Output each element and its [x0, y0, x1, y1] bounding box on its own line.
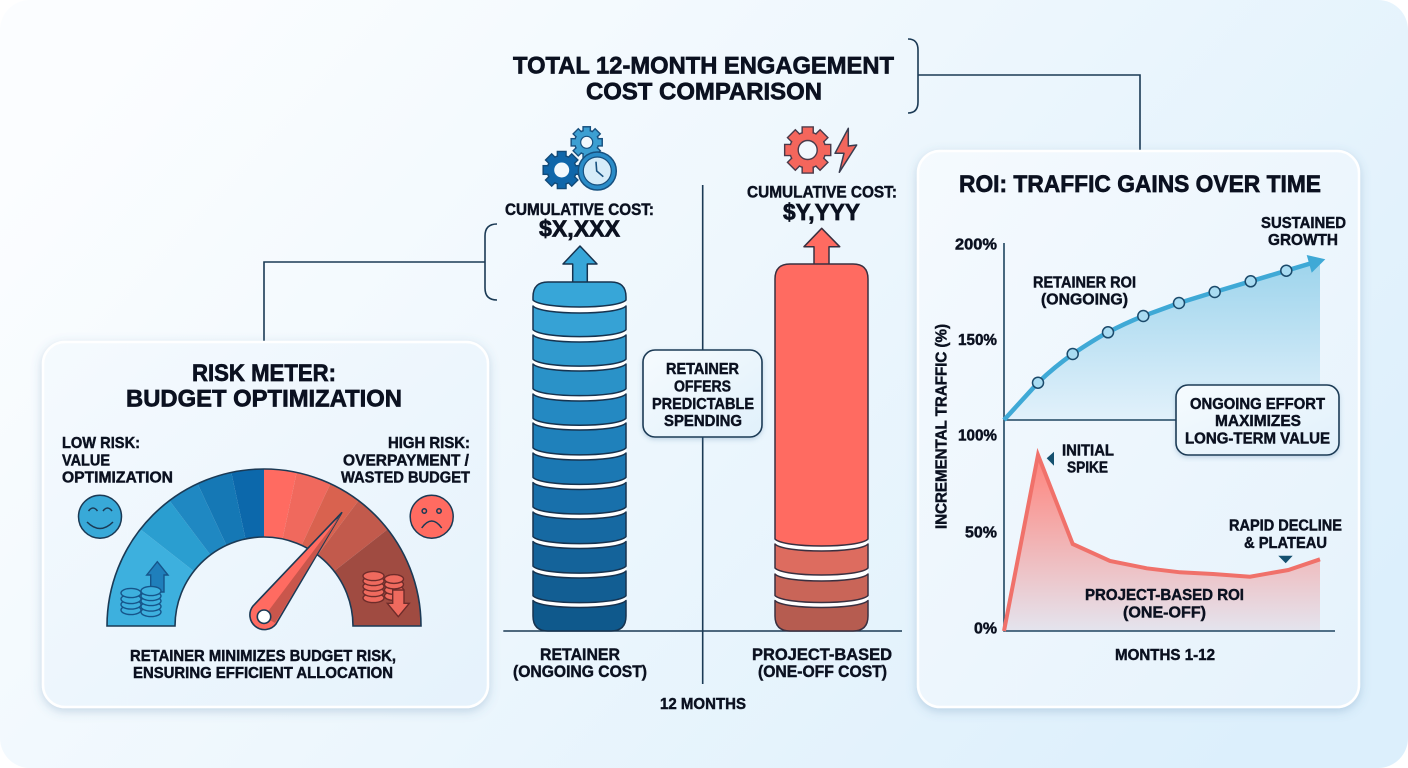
callout: long-term value: ONGOING EFFORT: [1190, 396, 1326, 413]
marker: spike: [1047, 452, 1054, 466]
label: high risk: OVERPAYMENT /: [343, 452, 470, 470]
callout: predictable spending: SPENDING: [664, 413, 742, 430]
connector: title bracket to ROI panel: [908, 39, 1140, 151]
axes: [1004, 243, 1335, 631]
title: COST COMPARISON: [586, 78, 822, 106]
arrow: retainer cost up: [563, 246, 597, 285]
title: TOTAL 12-MONTH ENGAGEMENT: [513, 52, 894, 80]
y-axis labels: 150%: [958, 332, 997, 349]
label: initial spike: [1062, 443, 1114, 477]
gauge: [107, 469, 421, 630]
divider: center line: [503, 185, 902, 684]
label: project-based bar: (ONE-OFF COST): [758, 663, 887, 681]
title: [513, 52, 894, 106]
callout: predictable spending: [643, 350, 762, 437]
label: initial spike: SPIKE: [1067, 460, 1108, 477]
icon: coins with down arrow: [363, 571, 409, 617]
callout: long-term value: [1176, 385, 1339, 455]
label: retainer cumulative cost: [505, 201, 654, 242]
x-axis title: MONTHS 1-12: [1115, 647, 1215, 664]
label: 12 months: 12 MONTHS: [660, 696, 746, 713]
label: high risk: WASTED BUDGET: [341, 470, 470, 486]
text: risk takeaway: [130, 648, 396, 682]
y-axis labels: 200%: [955, 236, 997, 253]
label: project-based bar: [752, 646, 892, 681]
callout: predictable spending: RETAINER: [666, 361, 739, 378]
callout: predictable spending: OFFERS: [674, 378, 731, 396]
label: project cumulative cost: CUMULATIVE COST:: [747, 184, 897, 202]
label: rapid decline: [1229, 518, 1342, 552]
label: project-based ROI: [1085, 587, 1244, 621]
label: retainer bar: [513, 646, 647, 681]
callout: predictable spending: PREDICTABLE: [652, 396, 754, 413]
label: low risk: LOW RISK:: [62, 435, 140, 452]
y-axis title: INCREMENTAL TRAFFIC (%): [934, 324, 950, 529]
icon: gear and lightning: [785, 127, 857, 173]
label: retainer bar: RETAINER: [540, 646, 620, 664]
icon: frowning face: [410, 495, 453, 538]
label: sustained growth: GROWTH: [1268, 232, 1338, 249]
label: project-based ROI: (ONE-OFF): [1123, 604, 1206, 621]
line: project-based ROI: [1004, 455, 1320, 631]
label: project-based ROI: PROJECT-BASED ROI: [1085, 587, 1244, 604]
label: retainer cumulative cost: $X,XXX: [539, 216, 621, 242]
icon: gears and clock: [543, 127, 616, 190]
label: high risk: HIGH RISK:: [388, 435, 470, 452]
label: rapid decline: RAPID DECLINE: [1229, 518, 1342, 535]
label: high risk: [341, 435, 470, 486]
line: retainer ROI: [1004, 255, 1325, 420]
arrow: project cost up: [804, 228, 840, 267]
label: low risk: VALUE: [62, 452, 110, 470]
icon: smiling face: [78, 495, 122, 538]
bar: retainer ongoing cost: [533, 246, 626, 631]
callout: long-term value: LONG-TERM VALUE: [1185, 430, 1330, 447]
heading: risk meter: [126, 360, 402, 412]
needle: [250, 513, 342, 630]
text: risk takeaway: ENSURING EFFICIENT ALLOCATION: [133, 665, 393, 682]
label: sustained growth: SUSTAINED: [1261, 215, 1346, 232]
y-axis labels: 100%: [958, 428, 997, 445]
label: project-based bar: PROJECT-BASED: [752, 646, 892, 664]
area: project-based: [1004, 455, 1320, 631]
chart: incremental traffic: [934, 215, 1346, 664]
text: risk takeaway: RETAINER MINIMIZES BUDGET RISK,: [130, 648, 396, 665]
heading: risk meter: BUDGET OPTIMIZATION: [126, 386, 402, 412]
icon: coins with up arrow: [121, 562, 168, 617]
heading: ROI: ROI: TRAFFIC GAINS OVER TIME: [959, 171, 1321, 198]
label: low risk: [62, 435, 173, 486]
label: rapid decline: & PLATEAU: [1244, 535, 1327, 552]
label: retainer cumulative cost: CUMULATIVE COST:: [505, 201, 654, 219]
y-axis labels: [955, 236, 997, 637]
bar: project-based one-off cost: [775, 228, 868, 631]
label: initial spike: INITIAL: [1062, 443, 1114, 460]
panel: ROI traffic gains: [918, 151, 1359, 707]
label: retainer ROI: RETAINER ROI: [1033, 274, 1136, 291]
heading: risk meter: RISK METER:: [192, 360, 336, 387]
marker: plateau: [1278, 556, 1293, 563]
label: retainer ROI: [1033, 274, 1136, 309]
label: project cumulative cost: $Y,YYY: [783, 199, 860, 225]
y-axis labels: 50%: [965, 524, 997, 541]
callout: long-term value: MAXIMIZES: [1215, 413, 1301, 430]
label: retainer bar: (ONGOING COST): [513, 663, 647, 681]
area: retainer: [1004, 261, 1320, 420]
y-axis labels: 0%: [974, 620, 997, 637]
connector: cost bracket to risk panel: [264, 224, 497, 342]
label: sustained growth: [1261, 215, 1346, 249]
label: retainer ROI: (ONGOING): [1041, 292, 1128, 309]
panel: risk meter: [43, 342, 488, 707]
label: low risk: OPTIMIZATION: [62, 470, 173, 486]
label: project cumulative cost: [747, 184, 897, 225]
